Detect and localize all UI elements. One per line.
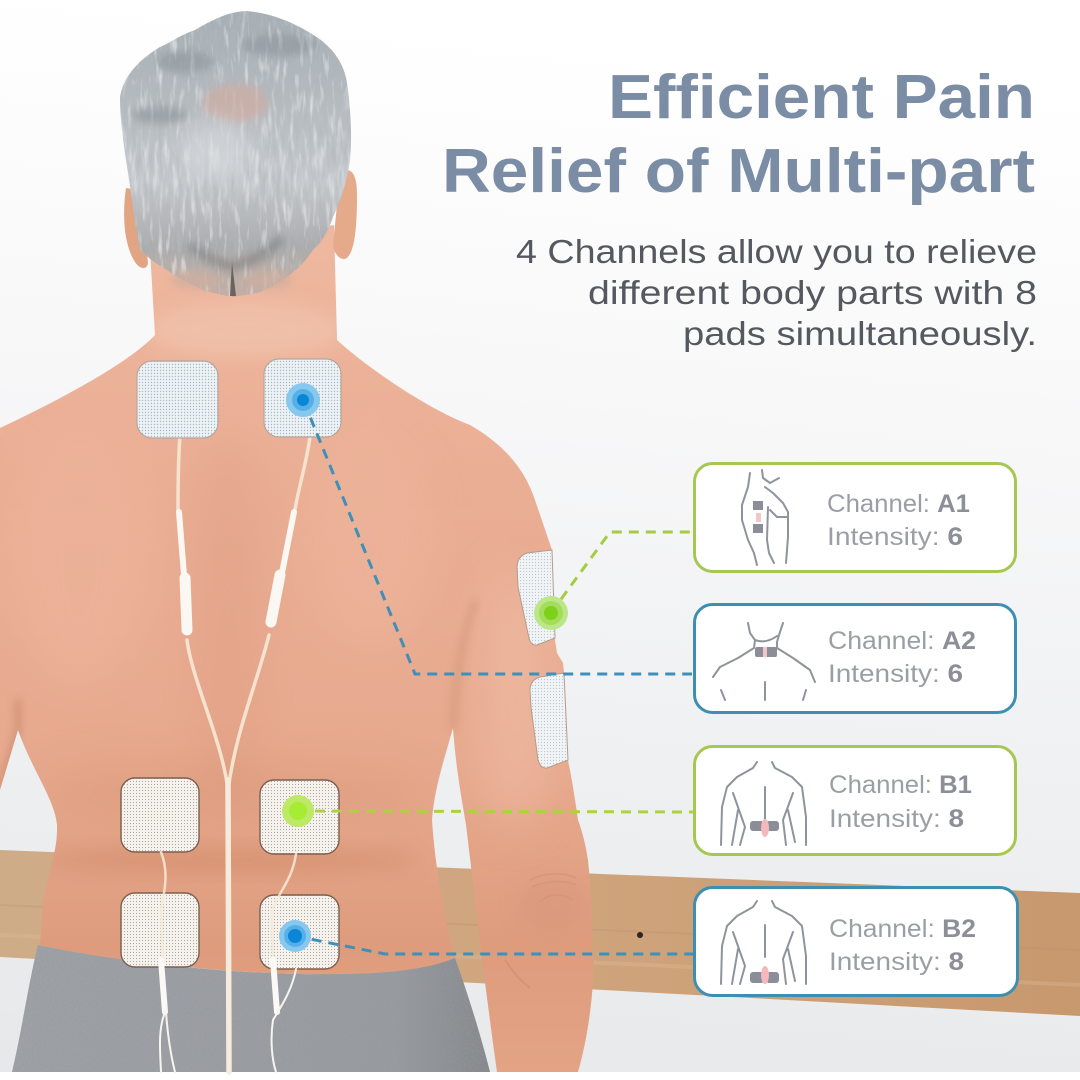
channel label B2: Channel: B2 (829, 915, 976, 943)
card: channel A2 (694, 604, 1016, 712)
subtitle: pads simultaneously. (683, 315, 1037, 352)
icon: neck with pads (713, 623, 815, 700)
electrode pad: lower back bottom right (260, 895, 339, 969)
title: Efficient Pain (608, 63, 1035, 132)
man: skin shading (0, 302, 587, 988)
wooden wall rail (0, 850, 1080, 1016)
man: grey hair (120, 11, 351, 297)
intensity label B2: Intensity: 8 (829, 948, 964, 976)
electrode pad: lower back upper left (121, 778, 199, 852)
connector dashed line: A2 (304, 402, 692, 674)
man: pants (12, 945, 490, 1072)
intensity label A1: Intensity: 6 (827, 523, 963, 551)
subtitle (516, 233, 1037, 352)
target marker: blue lower back (279, 920, 311, 952)
electrode pad: lower arm (530, 673, 568, 768)
electrode pad: upper right neck (264, 359, 341, 437)
electrode pad: lower back bottom left (121, 893, 199, 967)
man: skin of back and arms (0, 225, 593, 1072)
icon: back with low pads (721, 901, 806, 984)
connector dashed line: A1 (551, 532, 692, 613)
title (442, 63, 1035, 206)
lower pad wires (160, 852, 296, 1072)
intensity label B1: Intensity: 8 (829, 805, 964, 833)
man: ears (124, 171, 357, 268)
connector dashed line: B2 (295, 936, 694, 954)
electrode pad: upper arm (517, 550, 555, 645)
card: channel B2 (694, 888, 1018, 996)
channel label A1: Channel: A1 (827, 490, 970, 518)
connector dashed line: B1 (298, 811, 694, 812)
channel label B1: Channel: B1 (829, 771, 972, 799)
target marker: green lower back (282, 795, 314, 827)
target marker: blue neck (286, 383, 320, 417)
target marker: green arm (534, 596, 568, 630)
main lead wires (178, 436, 310, 1072)
icon: back with lumbar pads (721, 762, 806, 845)
title: Relief of Multi-part (442, 137, 1035, 206)
icon: arm with pads (742, 470, 788, 565)
intensity label A2: Intensity: 6 (828, 660, 963, 688)
electrode pad: lower back upper right (260, 780, 339, 854)
subtitle: different body parts with 8 (588, 274, 1037, 311)
card: channel A1 (694, 464, 1016, 572)
channel label A2: Channel: A2 (828, 627, 976, 655)
electrode pad: upper left neck (137, 361, 218, 438)
subtitle: 4 Channels allow you to relieve (516, 233, 1037, 270)
wire connectors (179, 512, 294, 630)
card: channel B1 (694, 746, 1016, 854)
